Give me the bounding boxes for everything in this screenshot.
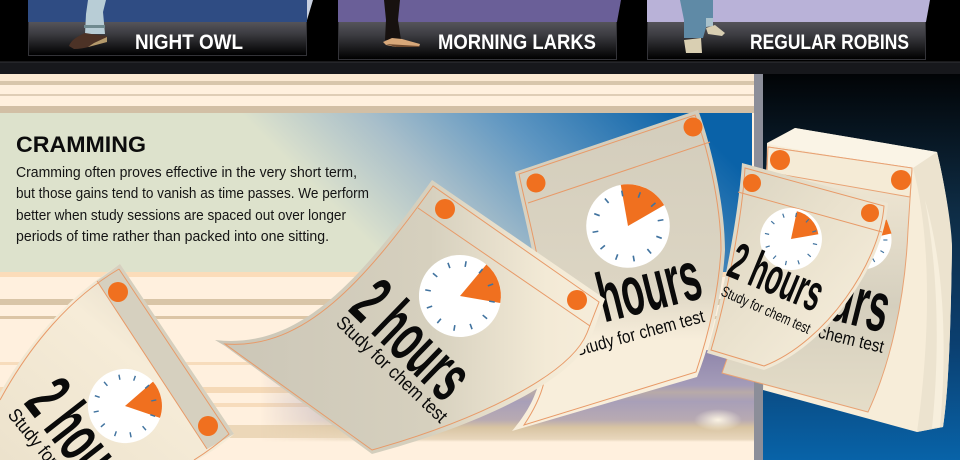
header line [97, 281, 207, 449]
notepad front page [722, 147, 912, 412]
sky panel [0, 113, 752, 272]
sheet: second [215, 180, 605, 454]
clock [580, 178, 676, 274]
text: 2 hours: 2 hours [559, 236, 709, 345]
label: regular robins: REGULAR ROBINS [750, 31, 909, 54]
body text: better when study sessions are spaced out over longer [16, 207, 346, 224]
grey divider [754, 74, 763, 460]
header line [738, 192, 882, 232]
body text: but those gains tend to vanish as time passes. We perform [16, 185, 369, 202]
label: morning larks: MORNING LARKS [438, 31, 596, 54]
body text: periods of time rather than packed into one sitting. [16, 228, 329, 245]
sheet: fourth [707, 163, 888, 370]
text: 2 hours: 2 hours [720, 233, 832, 323]
clock [754, 202, 828, 276]
pin left [526, 174, 546, 192]
floor highlight [694, 409, 742, 431]
text: study: Study for chem test [332, 312, 452, 428]
notepad header [767, 147, 912, 197]
notepad stack [722, 128, 952, 432]
panel: night owl [28, 0, 313, 56]
pin bottom [198, 416, 218, 436]
text: study: Study for chem test [573, 306, 707, 360]
header line [418, 208, 590, 326]
header line [528, 142, 710, 203]
legs and sandal: morning larks [383, 0, 420, 47]
body text [16, 164, 369, 245]
right dark column [763, 74, 960, 460]
notepad pin right [891, 170, 911, 190]
sheet: first [0, 264, 234, 460]
notepad text: study: Study for chem test [752, 306, 886, 357]
clock [402, 238, 518, 354]
clock [73, 354, 177, 458]
notepad pin left [770, 150, 790, 170]
panel: morning larks [338, 0, 621, 60]
label: night owl: NIGHT OWL [135, 31, 243, 54]
sheet: third [512, 110, 725, 431]
header band [97, 264, 234, 449]
panel: regular robins [647, 0, 930, 60]
pin right [684, 118, 702, 136]
heading: cramming: CRAMMING [16, 132, 146, 157]
pin right [567, 290, 587, 310]
legs and shoes: regular robins [680, 0, 725, 53]
body text: Cramming often proves effective in the very short term, [16, 164, 357, 181]
pin right [861, 204, 879, 222]
notepad clock [832, 210, 892, 270]
pin left [743, 174, 761, 192]
cream background stripes [0, 74, 754, 460]
text: study: Study for chem test [718, 283, 814, 338]
pin top [108, 282, 128, 302]
pin left [435, 199, 455, 219]
floor shadow [260, 350, 754, 442]
legs and shoe: night owl [69, 0, 107, 49]
